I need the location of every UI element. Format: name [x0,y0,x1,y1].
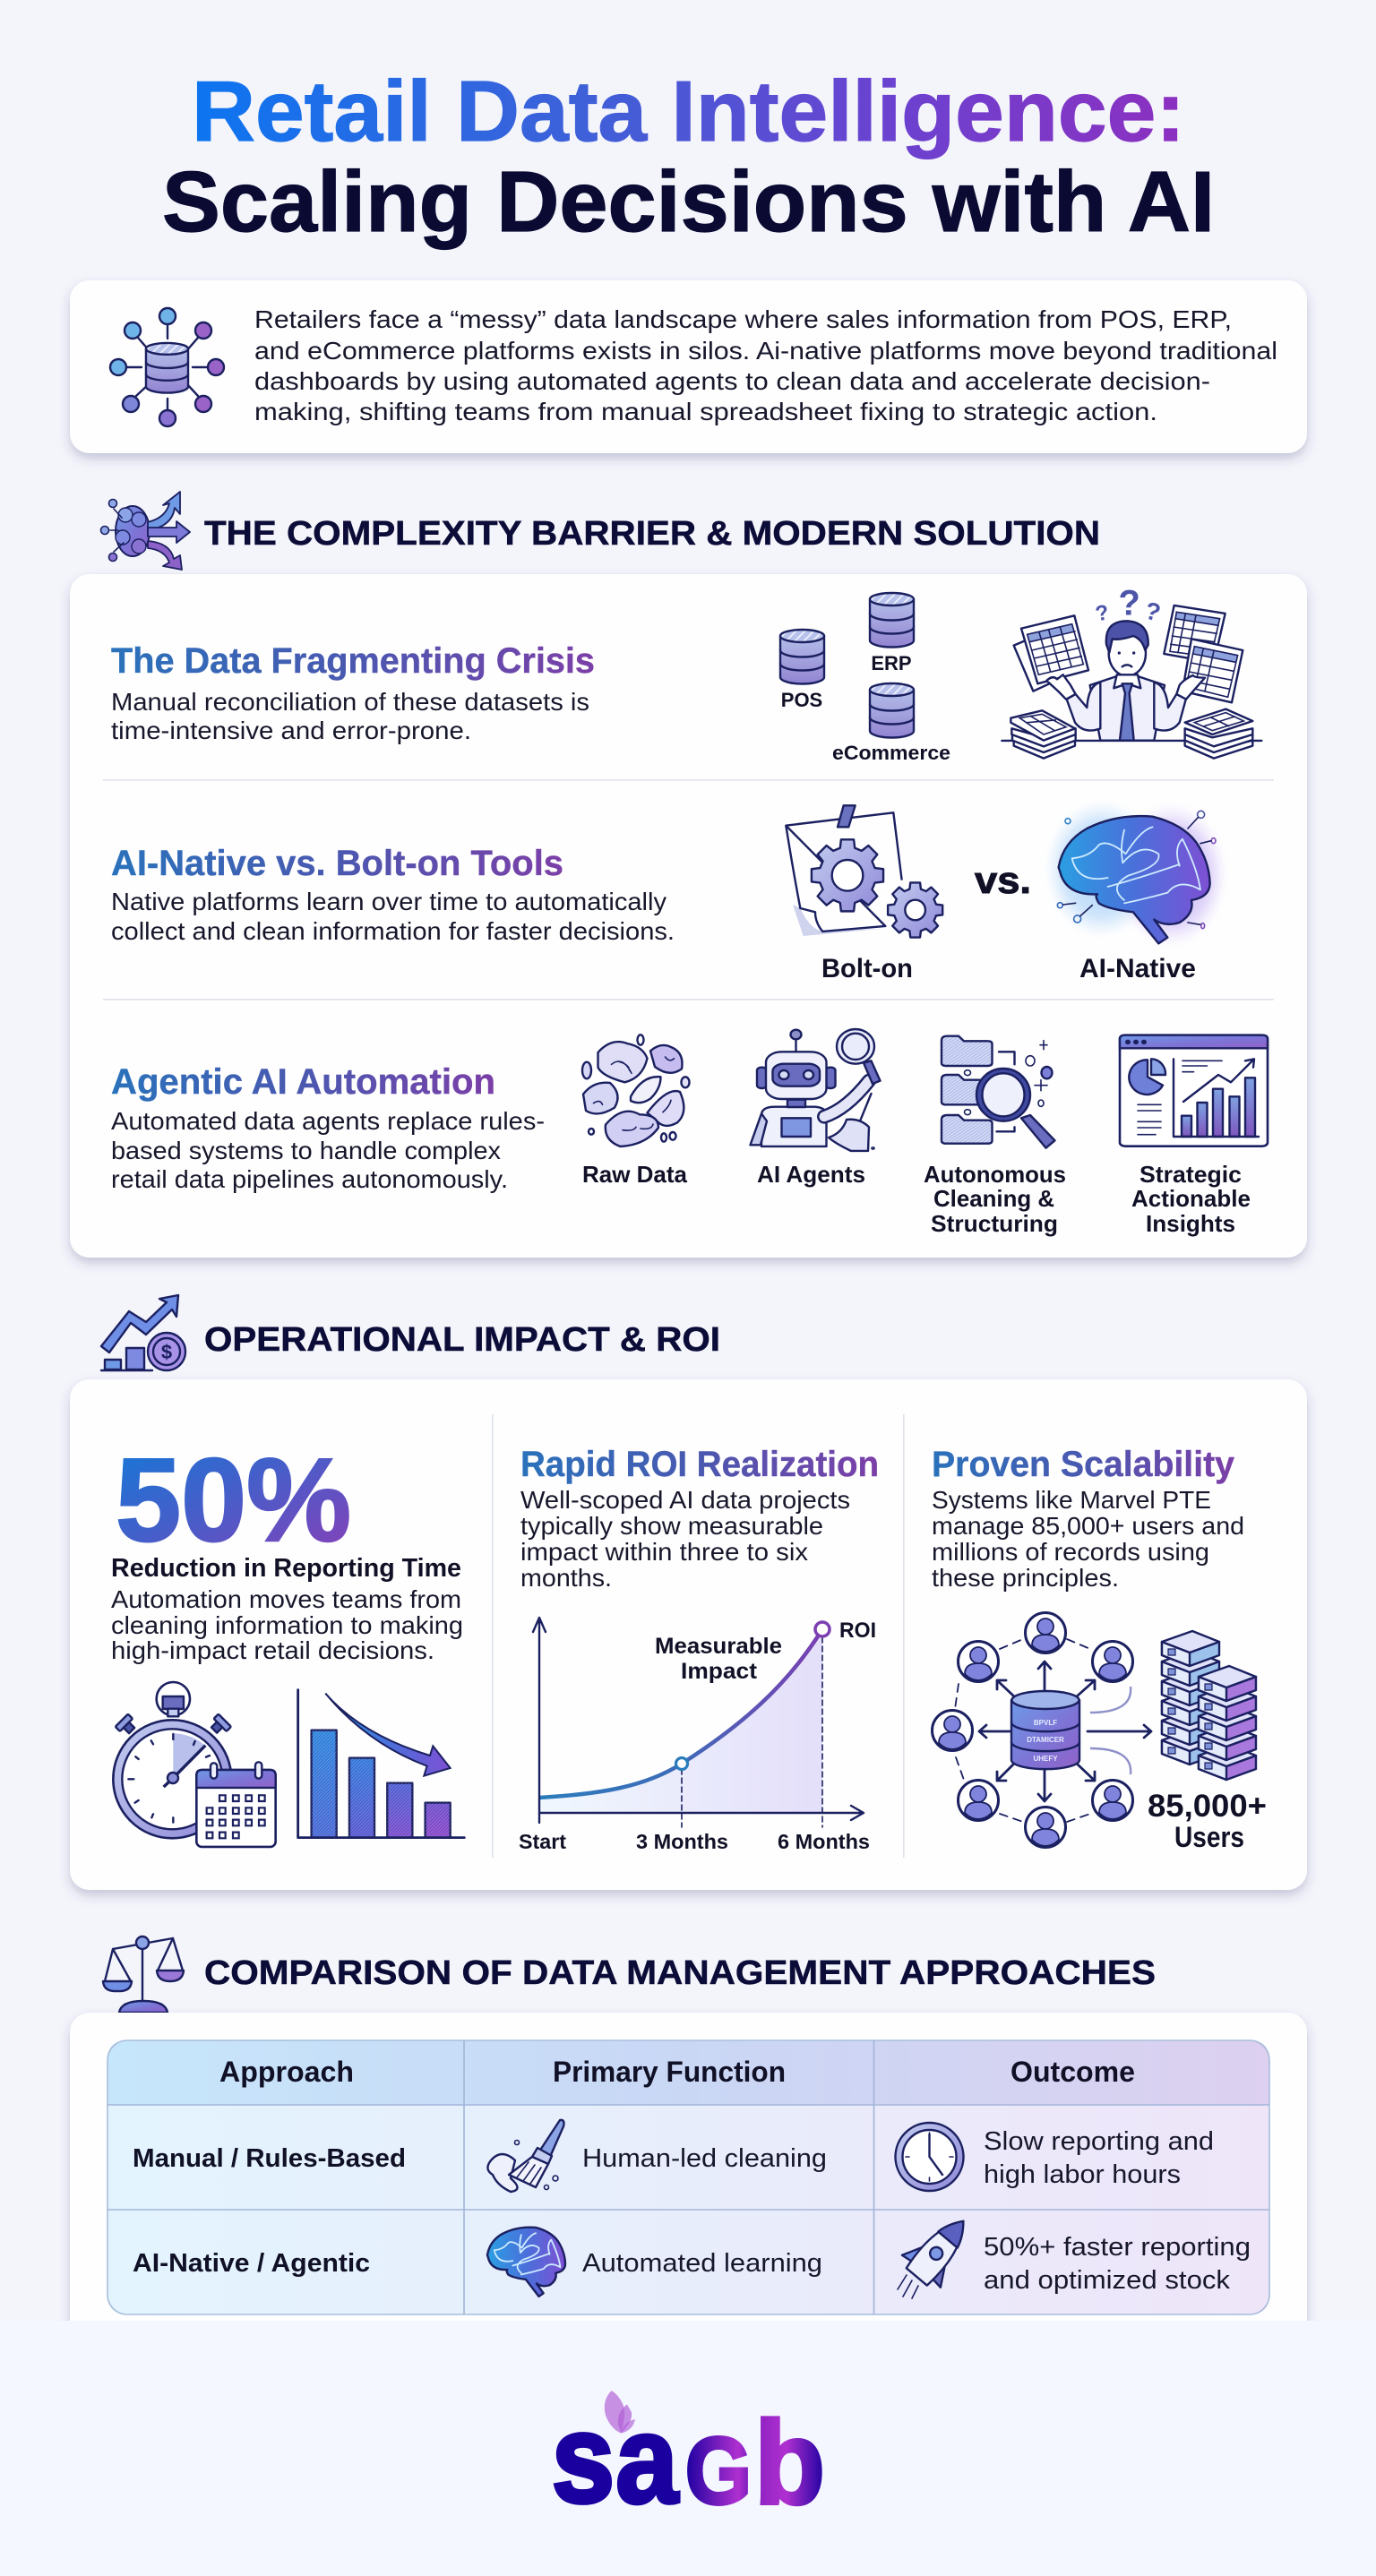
stat: 50 percent: high-impact retail decisions. [111,1636,434,1664]
text: rapid ROI realization: impact within three to six [520,1538,808,1566]
logo [552,2388,825,2529]
intro text: Retailers face a “messy” data landscape where sales information from POS, ERP, [254,305,1232,333]
icon: strategic insights dashboard: Strategic [1140,1161,1242,1188]
logo: a [615,2389,679,2529]
stat: 50 percent: Reduction in Reporting Time [111,1554,461,1583]
icon: brain with arrows [100,492,190,570]
icon: ERP database: ERP [871,652,912,674]
diagram: user network and servers: 85,000+ [1148,1789,1267,1824]
table row: manual: high labor hours [984,2160,1181,2189]
sub-panel text: AI-native vs bolt-on [111,844,675,945]
heading: complexity barrier [100,492,1100,570]
panel: complexity and solution [70,574,1307,1258]
text: proven scalability: Proven Scalability [932,1445,1235,1484]
icon: bolt-on gears on paper: Bolt-on [821,954,913,983]
sub-panel text: data fragmenting crisis: The Data Fragmenting Crisis [111,641,595,681]
text: rapid ROI realization: Well-scoped AI data projects [520,1486,850,1514]
icon: folders and magnifier: Cleaning & [933,1185,1054,1212]
heading: complexity barrier: THE COMPLEXITY BARRIER & MODERN SOLUTION [204,515,1100,553]
table row: AI-native [133,2205,1251,2298]
stat: 50 percent [111,1434,463,1664]
table headers: Outcome [1010,2056,1135,2088]
table row: AI-native: and optimized stock [984,2266,1231,2295]
table headers: Primary Function [553,2056,786,2088]
icon: strategic insights dashboard: Actionable [1131,1185,1251,1212]
sub-panel text: AI-native vs bolt-on: collect and clean information for faster decisions. [111,917,675,945]
footer band [0,2321,1376,2576]
icon: stopwatch with calendar [113,1682,276,1847]
text: rapid ROI realization: typically show measurable [520,1512,823,1540]
logo: G [685,2418,752,2524]
table row: manual [133,2120,1214,2192]
chart: ROI curve: Start [519,1830,566,1853]
intro text: and eCommerce platforms exists in silos. Ai-native platforms move beyond traditional [254,337,1277,365]
panel: operational impact [70,1379,1307,1890]
logo: b [754,2397,825,2529]
icon: folders and magnifier: Autonomous [924,1161,1066,1188]
sub-panel text: data fragmenting crisis: Manual reconciliation of these datasets is [111,688,589,716]
icon: balance scale [103,1936,184,2013]
text: proven scalability: manage 85,000+ users and [932,1512,1244,1540]
icon: folders and magnifier [924,1036,1066,1237]
diagram: user network and servers [932,1612,1267,1853]
chart: ROI curve: Measurable [655,1634,782,1659]
sub-panel text: agentic AI automation: based systems to handle complex [111,1137,501,1164]
intro text: dashboards by using automated agents to clean data and accelerate decision- [254,367,1210,395]
icon: raw data blobs [582,1035,690,1188]
icon: POS database: POS [781,689,822,711]
icon: strategic insights dashboard: Insights [1146,1210,1235,1237]
icon: AI agent robot: AI Agents [757,1161,865,1188]
icon: folders and magnifier: Structuring [931,1210,1058,1237]
table grid [108,2040,1269,2314]
icon: rising chart with coin [101,1295,185,1370]
logo: s [552,2388,615,2529]
table row: manual: Manual / Rules-Based [133,2144,406,2173]
heading: operational impact [101,1295,720,1370]
icon: brain [487,2228,565,2297]
icon: AI agent robot [751,1029,880,1188]
icon: eCommerce database [832,683,950,764]
stat: 50 percent: cleaning information to making [111,1611,463,1639]
stat: 50 percent: 50% [116,1434,351,1566]
heading: operational impact: OPERATIONAL IMPACT & ROI [204,1321,720,1359]
text: proven scalability: these principles. [932,1564,1119,1592]
table headers [219,2056,1135,2088]
text: proven scalability: millions of records using [932,1538,1209,1566]
icon: AI-native glowing brain: AI-Native [1079,954,1196,983]
diagram: user network and servers: Users [1174,1821,1244,1853]
sub-panel text: agentic AI automation: Agentic AI Automation [111,1062,495,1102]
table row: AI-native: 50%+ faster reporting [984,2233,1251,2262]
chart: falling reporting time bars [298,1690,464,1838]
chart: ROI curve [519,1618,876,1853]
intro text: making, shifting teams from manual spreadsheet fixing to strategic action. [254,398,1157,425]
chart: ROI curve: Impact [681,1659,758,1684]
text: proven scalability [932,1445,1244,1592]
title: Scaling Decisions with AI [162,154,1215,250]
heading: comparison: COMPARISON OF DATA MANAGEMENT APPROACHES [204,1954,1156,1992]
diagram: user network and servers: BPVLF [1034,1719,1057,1727]
table headers: Approach [219,2056,354,2088]
sub-panel text: agentic AI automation: retail data pipelines autonomously. [111,1165,508,1193]
icon: AI-native glowing brain [1045,800,1227,983]
panel: comparison table [70,2013,1307,2353]
illustration: confused analyst with spreadsheets: ? [1142,597,1164,627]
chart: ROI curve: ROI [839,1619,876,1643]
text: rapid ROI realization: months. [520,1564,612,1592]
illustration: confused analyst with spreadsheets: ? [1118,584,1140,623]
icon: database network [110,308,224,426]
panel: intro [70,280,1307,453]
sub-panel text: AI-native vs bolt-on: AI-Native vs. Bolt-on Tools [111,844,563,883]
table row: manual: Slow reporting and [984,2127,1214,2156]
intro text [254,305,1277,425]
sub-panel text: AI-native vs bolt-on: Native platforms learn over time to automatically [111,888,666,915]
title: Retail Data Intelligence: [192,64,1185,159]
diagram: user network and servers: UHEFY [1033,1755,1058,1763]
table row: AI-native: Automated learning [582,2249,822,2278]
icon: ERP database [870,593,914,674]
icon: paint brush [487,2120,564,2192]
icon: POS database [780,630,824,711]
sub-panel text: data fragmenting crisis [111,641,595,744]
title [162,64,1215,250]
sub-panel text: agentic AI automation: Automated data agents replace rules- [111,1107,545,1135]
sub-panel text: agentic AI automation [111,1062,545,1193]
diagram: user network and servers: DTAMICER [1027,1736,1064,1744]
chart: ROI curve: 6 Months [778,1830,870,1853]
text: proven scalability: Systems like Marvel PTE [932,1486,1211,1514]
icon: rising chart with coin: $ [161,1341,172,1363]
table row: AI-native: AI-Native / Agentic [133,2249,370,2278]
illustration: confused analyst with spreadsheets [1002,584,1261,759]
text: vs: vs. [975,859,1031,901]
table row: manual: Human-led cleaning [582,2144,827,2173]
icon: clock [896,2123,964,2191]
icon: strategic insights dashboard [1120,1035,1268,1237]
stat: 50 percent: Automation moves teams from [111,1585,461,1613]
illustration: confused analyst with spreadsheets: ? [1094,600,1111,626]
icon: eCommerce database: eCommerce [832,742,950,764]
icon: bolt-on gears on paper [786,805,942,983]
icon: rocket [898,2205,983,2298]
heading: comparison [103,1936,1156,2013]
sub-panel text: data fragmenting crisis: time-intensive and error-prone. [111,717,471,744]
icon: raw data blobs: Raw Data [582,1161,688,1188]
text: rapid ROI realization [520,1445,879,1592]
text: rapid ROI realization: Rapid ROI Realization [520,1445,879,1484]
chart: ROI curve: 3 Months [636,1830,728,1853]
